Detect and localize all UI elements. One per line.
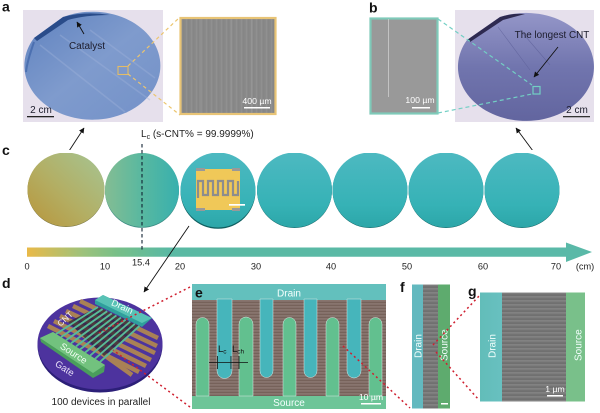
arrow: wafer 1 to a (69, 128, 84, 151)
SEM image a: 400 µm (242, 96, 272, 106)
text: Source: Source (58, 341, 89, 367)
panel b (369, 0, 594, 122)
scale bar: 2 cm: 2 cm (30, 105, 52, 116)
axis labels: 70 (551, 262, 561, 272)
text: Drain: Drain (109, 298, 135, 317)
source electrode fingers (192, 317, 386, 409)
gradient length arrow (27, 242, 592, 262)
wafer 5 (332, 152, 408, 228)
axis labels: 20 (175, 262, 185, 272)
wafer 3 with device (180, 152, 256, 229)
arrow: wafer 7 to b (516, 128, 533, 151)
Lc Lch measure: c (223, 348, 227, 356)
source strip (566, 292, 585, 402)
selection box (118, 66, 128, 74)
drain electrode (95, 295, 152, 327)
Lc Lch measure: L (232, 344, 237, 355)
label d: d (2, 275, 11, 291)
wafer 2 (105, 153, 179, 228)
text: CNT: CNT (55, 309, 75, 328)
axis labels: 30 (251, 262, 261, 272)
wafer 4 (257, 152, 332, 228)
text: Catalyst: Catalyst (69, 41, 105, 52)
axis labels: 15.4 (132, 258, 150, 268)
axis labels (24, 258, 594, 272)
scale bar (441, 403, 448, 404)
CNT stripes (48, 301, 158, 375)
panel g (468, 283, 585, 402)
scale bar: 2 cm: 2 cm (566, 105, 588, 116)
wafer 7 (484, 152, 560, 228)
label e: e (195, 284, 203, 300)
text: The longest CNT: The longest CNT (515, 30, 589, 41)
channel shadow (68, 307, 139, 356)
text: Drain: Drain (414, 334, 424, 358)
panel c (2, 142, 594, 272)
device schematic (38, 295, 162, 392)
drain strip (412, 284, 424, 408)
zoom lines (438, 19, 532, 113)
axis labels: 50 (402, 262, 412, 272)
selection box (533, 86, 540, 94)
text: Source: Source (440, 329, 450, 361)
caption: 100 devices in parallel (52, 397, 150, 408)
icon: device (196, 168, 245, 211)
arrow: wafer 3 to d (144, 226, 189, 292)
label c: c (2, 142, 10, 158)
SEM image b: 100 µm (405, 95, 435, 105)
scale bar: 10 µm (359, 392, 383, 402)
text: Lc threshold: (s-CNT% = 99.9999%) (150, 129, 254, 140)
text: Drain: Drain (277, 288, 301, 300)
fingers (56, 307, 139, 362)
source electrode (40, 332, 105, 378)
panel e (192, 284, 386, 409)
panel f (400, 279, 450, 408)
photo: wafer with longest CNT (455, 10, 594, 122)
axis labels: 0 (24, 262, 30, 272)
Lc Lch measure: L (218, 344, 223, 355)
Lc Lch measure (209, 344, 248, 369)
Lc Lch measure: ch (237, 348, 245, 356)
SEM image a (180, 18, 276, 114)
drain electrode fingers (192, 284, 386, 379)
wafer 6 (408, 152, 484, 228)
arrow: to longest CNT (534, 47, 558, 77)
drain strip (480, 292, 502, 402)
scale bar: 1 µm (545, 384, 565, 394)
text: Drain: Drain (488, 334, 498, 358)
dashed line Lc (141, 144, 143, 251)
text: Gate: Gate (53, 359, 76, 379)
axis labels: 60 (478, 262, 488, 272)
text: Source: Source (574, 329, 584, 361)
wafer 1 (28, 152, 104, 227)
text: Lc threshold: L (141, 129, 147, 140)
axis labels: (cm) (576, 262, 594, 272)
channel (502, 292, 566, 402)
photo: wafer with catalyst (23, 10, 163, 122)
text: Lc threshold: c (147, 134, 151, 141)
source strip (438, 284, 450, 408)
label f: f (400, 279, 405, 295)
text: Source: Source (273, 398, 305, 409)
label g: g (468, 283, 477, 299)
SEM image b (370, 18, 438, 114)
axis labels: 10 (100, 262, 110, 272)
arrow: to catalyst (77, 22, 84, 34)
channel (423, 284, 438, 408)
panel a (2, 0, 276, 122)
panel d (2, 275, 162, 408)
axis labels: 40 (326, 262, 336, 272)
zoom lines (128, 17, 180, 115)
red zoom lines (97, 287, 480, 408)
